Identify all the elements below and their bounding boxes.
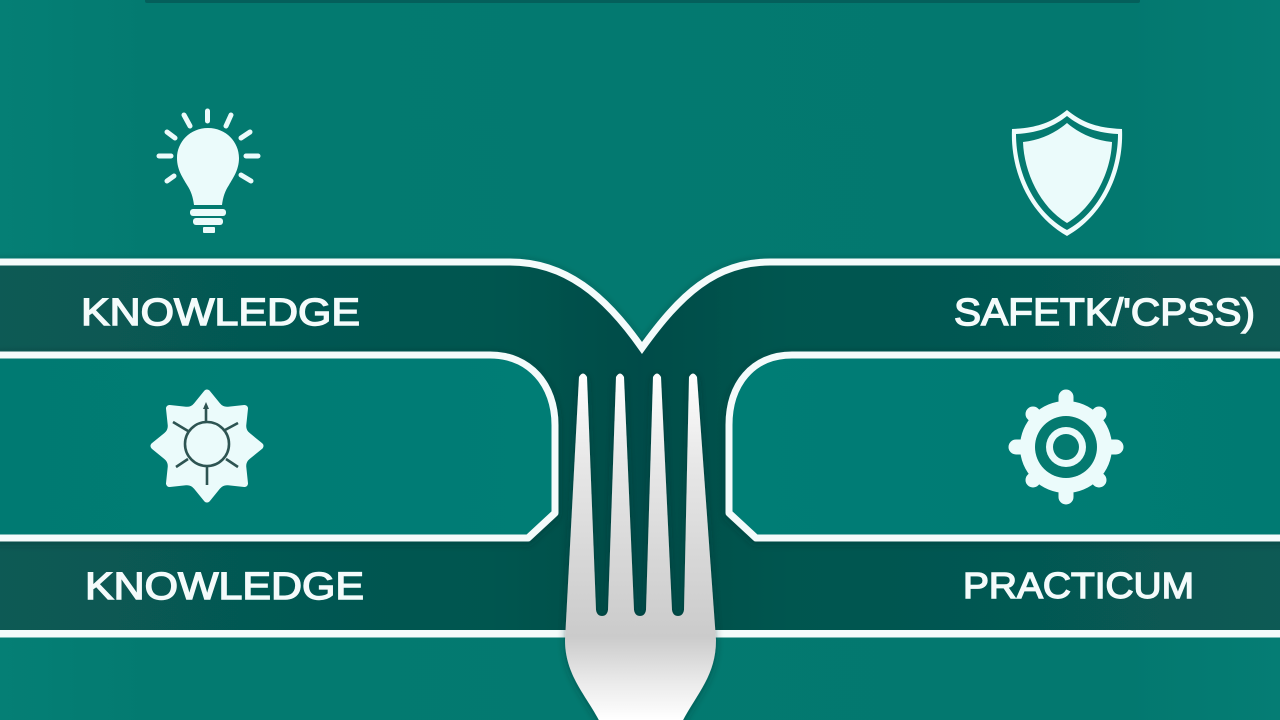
icon: light bulb: [159, 111, 258, 233]
heading: safety: SAFETK/'CPSS): [954, 292, 1255, 334]
top bar: [145, 0, 1140, 3]
heading: knowledge bottom: KNOWLEDGE: [85, 566, 364, 608]
panel: lower right: [729, 355, 1280, 538]
bottom divider line: [0, 630, 1280, 638]
icon: shield: [1012, 110, 1122, 236]
dark band with central notch: [0, 262, 1280, 634]
icon: sun gear: [154, 393, 260, 499]
heading: practicum: PRACTICUM: [963, 565, 1194, 606]
bottom teal area: [0, 637, 1280, 720]
heading: knowledge top: KNOWLEDGE: [81, 292, 360, 334]
icon: fork: [565, 374, 716, 720]
panel: lower left: [0, 355, 555, 538]
icon: cog: [1016, 397, 1116, 497]
